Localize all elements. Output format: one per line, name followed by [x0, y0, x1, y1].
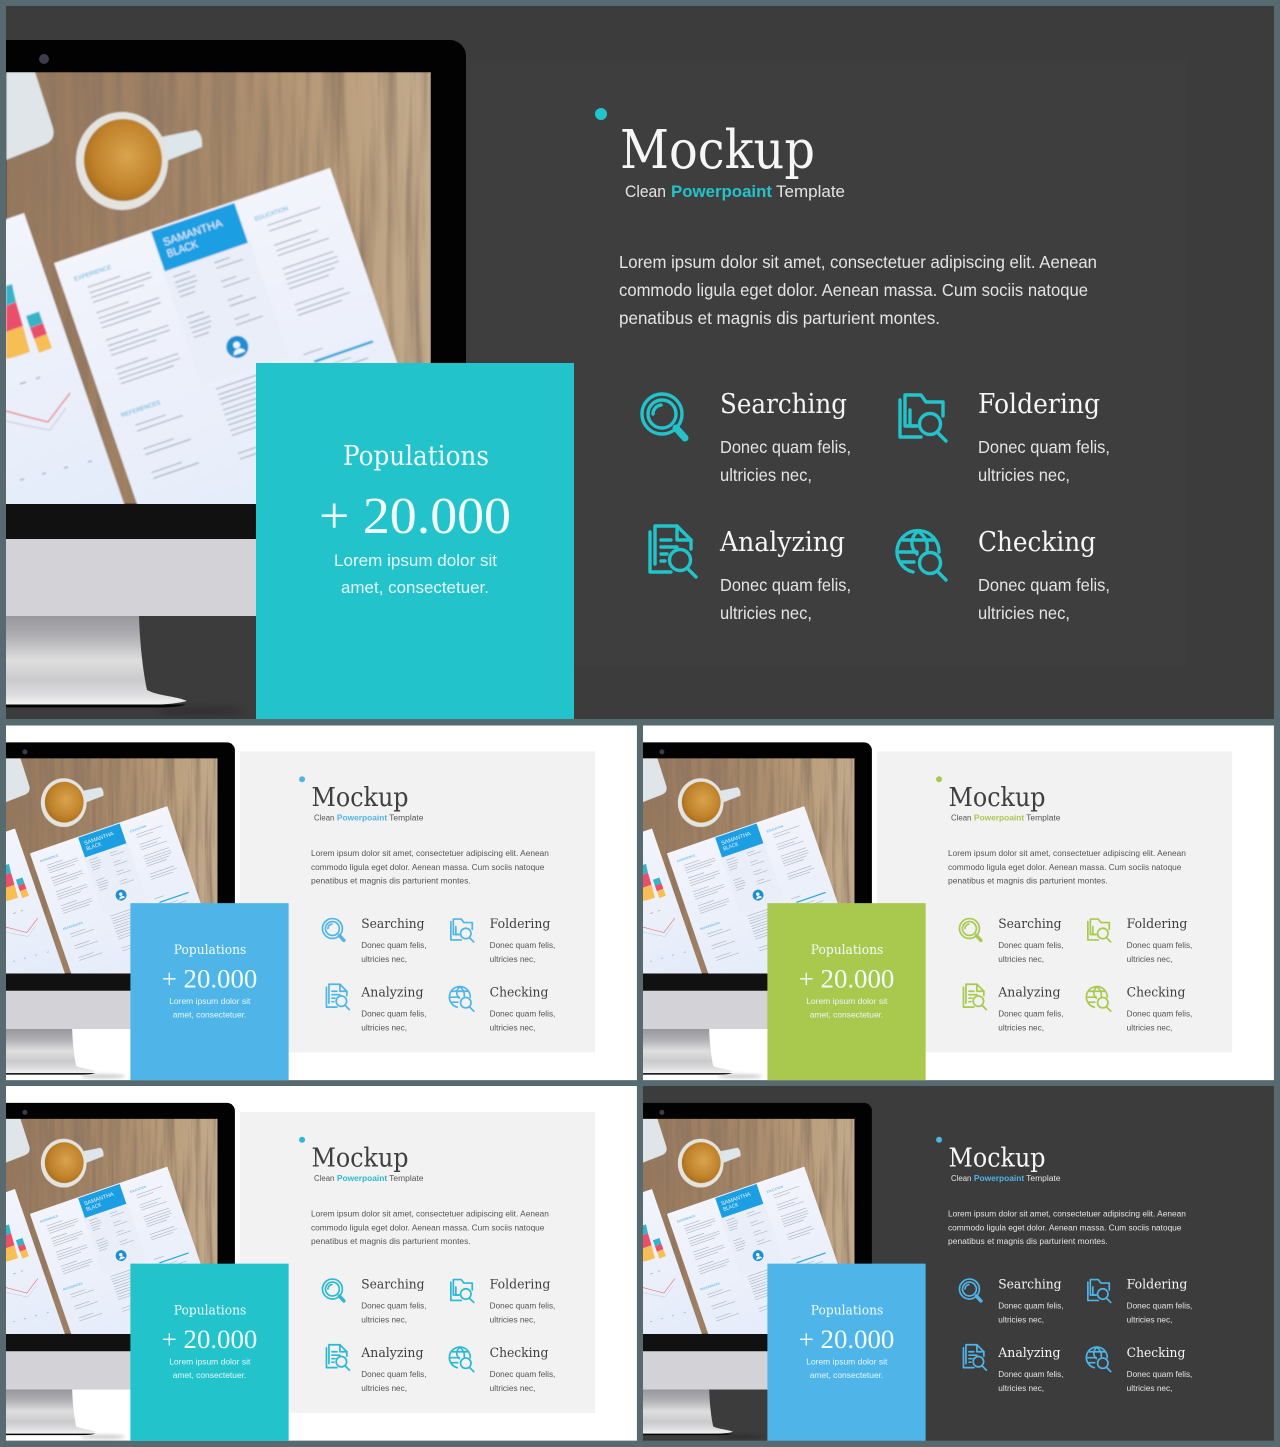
feature: analyzing	[997, 986, 1063, 1033]
feature: checking: Donec quam felis,	[1127, 1009, 1192, 1019]
subtitle: Clean	[951, 1174, 972, 1183]
feature: foldering: ultricies nec,	[490, 954, 535, 964]
card: populations	[767, 1264, 926, 1441]
feature: analyzing: ultricies nec,	[998, 1023, 1044, 1033]
paragraph	[619, 252, 1097, 328]
card: populations: Populations	[174, 1303, 246, 1318]
paragraph: commodo ligula eget dolor. Aenean massa. Cum sociis natoque	[311, 1222, 545, 1232]
paragraph: commodo ligula eget dolor. Aenean massa. Cum sociis natoque	[948, 1222, 1182, 1232]
feature: searching: Donec quam felis,	[998, 1300, 1063, 1310]
feature: checking: Donec quam felis,	[490, 1009, 555, 1019]
subtitle: Powerpoaint	[671, 183, 773, 201]
accent dot	[299, 776, 305, 782]
icon: searching	[322, 1279, 344, 1301]
feature: searching: ultricies nec,	[720, 465, 812, 485]
feature: analyzing: Analyzing	[360, 1346, 424, 1361]
paragraph	[948, 1208, 1186, 1246]
icon: foldering	[900, 395, 946, 441]
paragraph: penatibus et magnis dis parturient montes.	[619, 308, 940, 328]
content panel	[240, 1112, 595, 1413]
paragraph: Lorem ipsum dolor sit amet, consectetuer adipiscing elit. Aenean	[311, 848, 549, 858]
icon: foldering	[451, 919, 474, 942]
icon: checking	[1086, 987, 1111, 1011]
paragraph: Lorem ipsum dolor sit amet, consectetuer adipiscing elit. Aenean	[948, 1208, 1186, 1218]
feature: foldering	[490, 917, 555, 964]
icon: checking	[449, 987, 474, 1011]
feature: analyzing: ultricies nec,	[361, 1383, 407, 1393]
feature: foldering: Foldering	[490, 1278, 551, 1293]
subtitle	[314, 814, 424, 822]
paragraph: Lorem ipsum dolor sit amet, consectetuer adipiscing elit. Aenean	[311, 1208, 549, 1218]
card: populations: Populations	[811, 943, 883, 958]
paragraph	[311, 848, 549, 886]
monitor mockup with photo	[511, 742, 872, 1078]
paragraph: commodo ligula eget dolor. Aenean massa. Cum sociis natoque	[619, 280, 1088, 300]
card: populations	[256, 363, 574, 719]
feature: foldering: Donec quam felis,	[1127, 1300, 1192, 1310]
paragraph: Lorem ipsum dolor sit amet, consectetuer adipiscing elit. Aenean	[619, 252, 1097, 272]
feature: checking: Checking	[490, 1346, 549, 1361]
feature: foldering: Donec quam felis,	[490, 940, 555, 950]
feature: checking: Checking	[490, 986, 549, 1001]
card: populations: Populations	[811, 1303, 883, 1318]
card: populations: Lorem ipsum dolor sit	[169, 996, 251, 1006]
paragraph: penatibus et magnis dis parturient montes.	[948, 1236, 1108, 1246]
feature: checking: Donec quam felis,	[1127, 1369, 1192, 1379]
icon: foldering	[1088, 919, 1111, 942]
feature: searching	[361, 1278, 426, 1324]
card: populations: Lorem ipsum dolor sit	[169, 1357, 251, 1367]
icon: searching	[959, 919, 981, 940]
slide: light green	[643, 726, 1274, 1080]
feature: searching: Donec quam felis,	[361, 940, 426, 950]
feature: analyzing: Donec quam felis,	[361, 1369, 426, 1379]
feature: searching: ultricies nec,	[361, 954, 407, 964]
subtitle: Template	[1026, 814, 1061, 823]
subtitle: Template	[389, 814, 424, 823]
paragraph: commodo ligula eget dolor. Aenean massa. Cum sociis natoque	[311, 862, 545, 872]
subtitle: Powerpoaint	[974, 1174, 1024, 1183]
title: Mockup	[620, 120, 815, 181]
feature: analyzing: Donec quam felis,	[361, 1009, 426, 1019]
monitor mockup with photo	[0, 40, 467, 715]
card: populations: Lorem ipsum dolor sit	[806, 996, 888, 1006]
card: populations	[130, 1264, 289, 1441]
feature: foldering: Foldering	[1127, 1278, 1188, 1293]
paragraph: penatibus et magnis dis parturient montes.	[311, 876, 471, 886]
card: populations: Lorem ipsum dolor sit	[806, 1357, 888, 1367]
feature: analyzing: Analyzing	[997, 1346, 1061, 1361]
subtitle: Clean	[314, 1174, 335, 1183]
feature: foldering	[978, 389, 1110, 485]
icon: foldering	[451, 1280, 474, 1302]
feature: checking	[1127, 986, 1192, 1033]
feature: searching	[720, 389, 851, 485]
content panel	[877, 751, 1232, 1052]
feature: checking: ultricies nec,	[490, 1383, 535, 1393]
card: populations: amet, consectetuer.	[173, 1010, 246, 1020]
subtitle	[951, 1174, 1061, 1183]
monitor mockup with photo	[511, 1103, 872, 1439]
feature: searching: Donec quam felis,	[361, 1300, 426, 1310]
card: populations: amet, consectetuer.	[173, 1370, 246, 1380]
slide background	[6, 1086, 637, 1441]
icon: searching	[959, 1279, 981, 1301]
feature: foldering: Foldering	[1127, 917, 1188, 932]
accent dot	[936, 1137, 942, 1143]
feature: foldering: ultricies nec,	[978, 465, 1070, 485]
paragraph: penatibus et magnis dis parturient montes.	[948, 876, 1108, 886]
feature: checking	[490, 986, 555, 1033]
subtitle	[314, 1174, 424, 1183]
feature: searching: ultricies nec,	[361, 1314, 407, 1324]
icon: analyzing	[650, 526, 696, 577]
feature: analyzing	[997, 1346, 1063, 1393]
feature: searching: Donec quam felis,	[720, 437, 851, 457]
subtitle: Template	[389, 1174, 424, 1183]
content panel	[240, 751, 595, 1052]
feature: checking: Checking	[978, 527, 1096, 558]
monitor mockup with photo	[0, 742, 235, 1078]
feature: analyzing: Analyzing	[997, 986, 1061, 1001]
feature: analyzing: ultricies nec,	[361, 1023, 407, 1033]
feature: searching: Searching	[720, 389, 847, 420]
feature: foldering: Donec quam felis,	[490, 1300, 555, 1310]
subtitle: Template	[776, 183, 845, 201]
feature: checking: ultricies nec,	[978, 603, 1070, 623]
card: populations: amet, consectetuer.	[341, 578, 489, 597]
subtitle: Powerpoaint	[974, 814, 1024, 823]
feature: checking	[490, 1346, 555, 1393]
accent dot	[595, 108, 607, 120]
subtitle: Template	[1026, 1174, 1061, 1183]
icon: analyzing	[326, 1345, 349, 1370]
slide background	[643, 726, 1274, 1080]
feature: searching: Donec quam felis,	[998, 940, 1063, 950]
feature: foldering: Foldering	[490, 917, 551, 932]
title: Mockup	[949, 1144, 1046, 1174]
feature: foldering	[1127, 1278, 1192, 1324]
feature: checking: ultricies nec,	[1127, 1023, 1172, 1033]
paragraph: commodo ligula eget dolor. Aenean massa. Cum sociis natoque	[948, 862, 1182, 872]
feature: foldering: ultricies nec,	[1127, 1314, 1172, 1324]
subtitle: Clean	[314, 814, 335, 823]
feature: searching: ultricies nec,	[998, 954, 1044, 964]
card: populations: + 20.000	[799, 965, 894, 994]
feature: checking: Donec quam felis,	[490, 1369, 555, 1379]
title: Mockup	[949, 783, 1046, 813]
slide background	[643, 1086, 1274, 1441]
icon: checking	[897, 531, 946, 580]
accent dot	[936, 776, 942, 782]
feature: searching: Searching	[361, 1278, 425, 1293]
subtitle	[951, 814, 1061, 823]
card: populations: amet, consectetuer.	[810, 1370, 883, 1380]
card: populations: + 20.000	[162, 1325, 257, 1354]
feature: foldering	[1127, 917, 1192, 964]
feature: checking: Donec quam felis,	[978, 575, 1110, 595]
icon: searching	[642, 394, 685, 438]
paragraph	[948, 848, 1186, 886]
feature: analyzing: ultricies nec,	[720, 603, 812, 623]
card: populations: + 20.000	[162, 965, 257, 994]
slide background	[6, 6, 1274, 719]
card: populations: Populations	[343, 441, 489, 472]
subtitle: Powerpoaint	[337, 814, 387, 823]
slide: dark blue	[511, 1086, 1274, 1441]
feature: searching	[361, 917, 426, 964]
feature: checking: Checking	[1127, 986, 1186, 1001]
feature: checking: ultricies nec,	[1127, 1383, 1172, 1393]
content panel	[470, 60, 1186, 666]
feature: searching: ultricies nec,	[998, 1314, 1044, 1324]
feature: checking: Checking	[1127, 1346, 1186, 1361]
feature: analyzing: Analyzing	[719, 527, 845, 558]
feature: searching	[998, 1278, 1063, 1324]
icon: searching	[322, 919, 344, 940]
feature: searching: Searching	[998, 917, 1062, 932]
slide: light blue	[0, 726, 637, 1080]
feature: checking	[1127, 1346, 1192, 1393]
icon: checking	[449, 1347, 474, 1372]
feature: foldering: Foldering	[978, 389, 1100, 420]
slide: light teal	[0, 1086, 637, 1441]
feature: checking	[978, 527, 1110, 623]
paragraph	[311, 1208, 549, 1246]
feature: searching	[998, 917, 1063, 964]
title: Mockup	[312, 1144, 409, 1174]
feature: analyzing: Analyzing	[360, 986, 424, 1001]
feature: searching: Searching	[361, 917, 425, 932]
feature: checking: ultricies nec,	[490, 1023, 535, 1033]
feature: analyzing: ultricies nec,	[998, 1383, 1044, 1393]
slide: large dark teal	[0, 6, 1274, 719]
feature: analyzing: Donec quam felis,	[998, 1369, 1063, 1379]
feature: analyzing	[360, 1346, 426, 1393]
feature: analyzing	[360, 986, 426, 1033]
card: populations	[767, 903, 926, 1080]
accent dot	[299, 1137, 305, 1143]
feature: analyzing: Donec quam felis,	[720, 575, 851, 595]
icon: foldering	[1088, 1280, 1111, 1302]
subtitle: Clean	[625, 183, 666, 201]
feature: foldering	[490, 1278, 555, 1324]
feature: analyzing	[719, 527, 851, 623]
subtitle: Powerpoaint	[337, 1174, 387, 1183]
monitor mockup with photo	[0, 1103, 235, 1439]
subtitle: Clean	[951, 814, 972, 823]
icon: analyzing	[326, 984, 349, 1010]
title: Mockup	[312, 783, 409, 813]
card: populations: + 20.000	[799, 1325, 894, 1354]
feature: searching: Searching	[998, 1278, 1062, 1293]
feature: foldering: ultricies nec,	[1127, 954, 1172, 964]
feature: foldering: Donec quam felis,	[978, 437, 1110, 457]
icon: checking	[1086, 1347, 1111, 1372]
feature: foldering: ultricies nec,	[490, 1314, 535, 1324]
paragraph: penatibus et magnis dis parturient montes.	[311, 1236, 471, 1246]
card: populations	[130, 903, 289, 1080]
feature: foldering: Donec quam felis,	[1127, 940, 1192, 950]
icon: analyzing	[963, 1345, 986, 1370]
card: populations: amet, consectetuer.	[810, 1010, 883, 1020]
card: populations: Populations	[174, 943, 246, 958]
card: populations: + 20.000	[319, 488, 511, 545]
paragraph: Lorem ipsum dolor sit amet, consectetuer adipiscing elit. Aenean	[948, 848, 1186, 858]
feature: analyzing: Donec quam felis,	[998, 1009, 1063, 1019]
slide background	[6, 726, 637, 1080]
card: populations: Lorem ipsum dolor sit	[334, 551, 497, 570]
subtitle	[625, 183, 845, 201]
icon: analyzing	[963, 984, 986, 1010]
